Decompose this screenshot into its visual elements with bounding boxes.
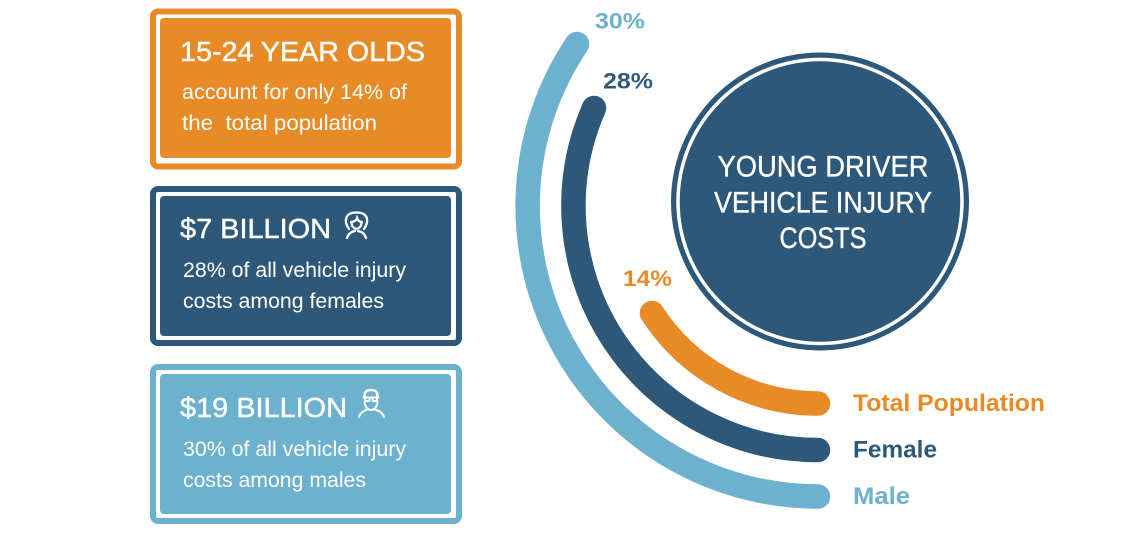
icon: male person (359, 390, 384, 417)
text: population share line 2: the total population (182, 112, 377, 135)
heading: 15-24 year olds: 15-24 YEAR OLDS (180, 36, 425, 67)
text: male costs: 30% of all vehicle injury (183, 438, 406, 461)
text: population share: account for only 14% of (182, 81, 407, 104)
panel: 15-24 year olds (153, 12, 459, 166)
panel: 19 billion male (153, 367, 459, 521)
legend: male: Male (853, 483, 910, 510)
label: 30 percent: 30% (595, 8, 645, 34)
panel: 7 billion female (153, 189, 459, 343)
circle title line 1: YOUNG DRIVER (718, 150, 928, 184)
heading: 19 billion: $19 BILLION (180, 392, 347, 423)
legend: female: Female (853, 436, 937, 464)
arc: male (528, 44, 818, 496)
arc: female (573, 108, 818, 450)
legend: total population: Total Population (853, 390, 1045, 417)
label: 28 percent: 28% (603, 68, 653, 94)
arc: total population (652, 313, 818, 404)
text: female costs line 2: costs among females (183, 290, 384, 313)
circle title line 2: VEHICLE INJURY (714, 186, 932, 220)
icon: female person (346, 212, 367, 238)
label: 14 percent: 14% (623, 266, 672, 291)
heading: 7 billion: $7 BILLION (180, 213, 331, 244)
circle: young driver vehicle injury costs (671, 52, 969, 350)
text: male costs line 2: costs among males (183, 469, 366, 492)
circle title line 3: COSTS (780, 222, 866, 255)
text: female costs: 28% of all vehicle injury (183, 259, 406, 282)
